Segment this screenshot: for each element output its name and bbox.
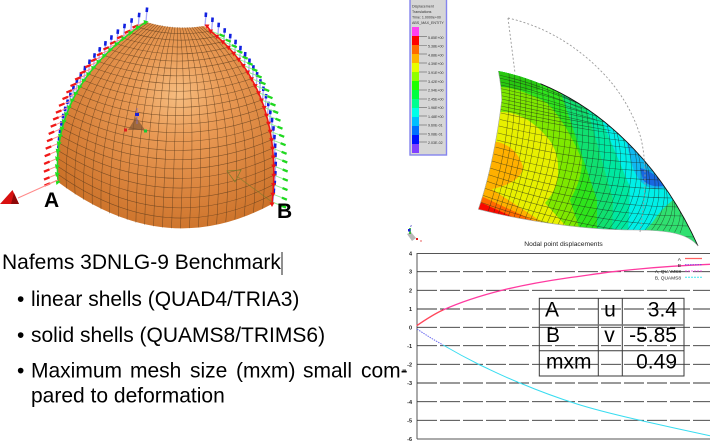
curve A [417,264,710,326]
bullet: maximum mesh size: size [190,360,227,382]
y axis tick labels: 2 [409,288,412,294]
y axis tick labels: 3 [409,270,412,276]
grid lines [417,272,710,420]
panel: orange dome model [0,22,274,228]
colour scale values: 1.96E+00 [428,106,444,110]
colour scale values [419,36,444,145]
icon: centre coordinate triad [124,108,147,132]
colour scale values: 5.38E+00 [428,44,444,48]
table grid [539,298,684,376]
table values: mxm [546,350,592,373]
chart frame [417,254,710,439]
icon: red cone arrow A [0,180,58,204]
table values [545,299,677,373]
icon: small axis triad: z [410,223,412,228]
chart title: Nodal point displacements [524,241,603,248]
y axis tick labels: -2 [407,362,412,368]
bullet: maximum mesh size: small [303,360,352,382]
y axis tick labels: 1 [409,307,412,313]
chart legend: A, QUAMS8 [655,269,681,275]
shell top edge [498,71,698,246]
colour scale values: 5.85E+00 [428,36,444,40]
icon: small axis triad: x [420,238,422,243]
colour scale values: 4.39E+00 [428,62,444,66]
table values: A [545,299,559,322]
colour scale values: 2.45E+00 [428,97,444,101]
bullet: solid shells: • [17,324,24,347]
colour scale values: 5.08E-01 [428,132,443,136]
left edge green constraint arrows [57,22,146,182]
table values: 3.4 [648,299,677,322]
legend heading: Time: 1.0000e+00 [412,16,441,20]
label B: B [277,200,292,223]
y axis tick labels: 4 [409,252,413,258]
bullet continuation: pared to deformation [31,384,225,408]
icon: small axis triad [407,223,422,243]
curve B [443,345,710,436]
colour scale swatches [412,27,419,153]
dome surface [57,22,274,228]
colour scale values: 3.91E+00 [428,71,444,75]
table values: u [604,299,616,322]
table values: B [546,324,560,347]
bullet: linear shells: • [17,288,24,311]
results table [539,298,684,376]
table values: 0.49 [636,350,677,373]
chart legend: B, QUAMS8 [655,276,681,282]
table values: v [604,324,615,347]
y axis title: u [402,369,408,373]
chart legend: A [678,257,682,263]
colour scale values: 9.60E-01 [428,124,443,128]
bullet list [17,288,408,408]
colour scale values: 2.94E+00 [428,88,444,92]
legend heading: ABS_MAX_ENTITY [412,21,444,25]
y axis tick labels: -5 [407,418,412,424]
y axis tick labels [407,252,413,441]
y axis tick labels: -3 [407,381,412,387]
y axis tick labels: -4 [407,400,413,406]
y axis tick labels: -1 [407,344,412,350]
curve B start segment [417,329,443,345]
bullet: maximum mesh size: • [17,360,24,382]
chart: nodal point displacements [402,252,710,441]
bullet: maximum mesh size: (mxm) [236,360,295,382]
y axis tick labels: 0 [409,326,412,332]
panel: deformed shell contour plot [478,71,698,246]
colour scale values: 4.88E+00 [428,53,444,57]
text cursor [282,252,283,275]
legend heading: Displacement [412,4,434,8]
bullet: maximum mesh size: com- [361,360,408,382]
icon: olive outline arrow B [227,170,272,202]
undeformed dotted outline [508,18,645,232]
colour scale values: 2.03E-02 [428,141,443,145]
load arrows behind dome: left edge blue and red [57,22,146,180]
table values: -5.85 [629,324,677,347]
colour scale values: 3.42E+00 [428,80,444,84]
curve A start segment [417,310,443,326]
panel: displacement contour legend [410,0,446,155]
bullet: maximum mesh size: mesh [130,360,181,382]
right edge red constraint arrows [207,26,274,204]
bullet: linear shells: linear shells (QUAD4/TRIA3) [31,288,299,311]
chart legend: B [678,263,681,269]
contour bands [478,71,697,244]
bullet: maximum mesh size: Maximum [31,360,122,382]
load arrows behind dome: right edge blue and green [204,26,274,202]
colour scale values: 1.48E+00 [428,115,444,119]
chart legend [655,257,702,282]
dome mesh lines [57,23,274,228]
shell mesh rows [480,73,696,243]
heading: benchmark title: Nafems 3DNLG-9 Benchmark [2,251,281,274]
label A: A [44,189,59,212]
bullet: solid shells: solid shells (QUAMS8/TRIMS6) [31,324,325,347]
legend heading: Translations [412,10,432,14]
shell left and bottom edge [478,71,698,246]
